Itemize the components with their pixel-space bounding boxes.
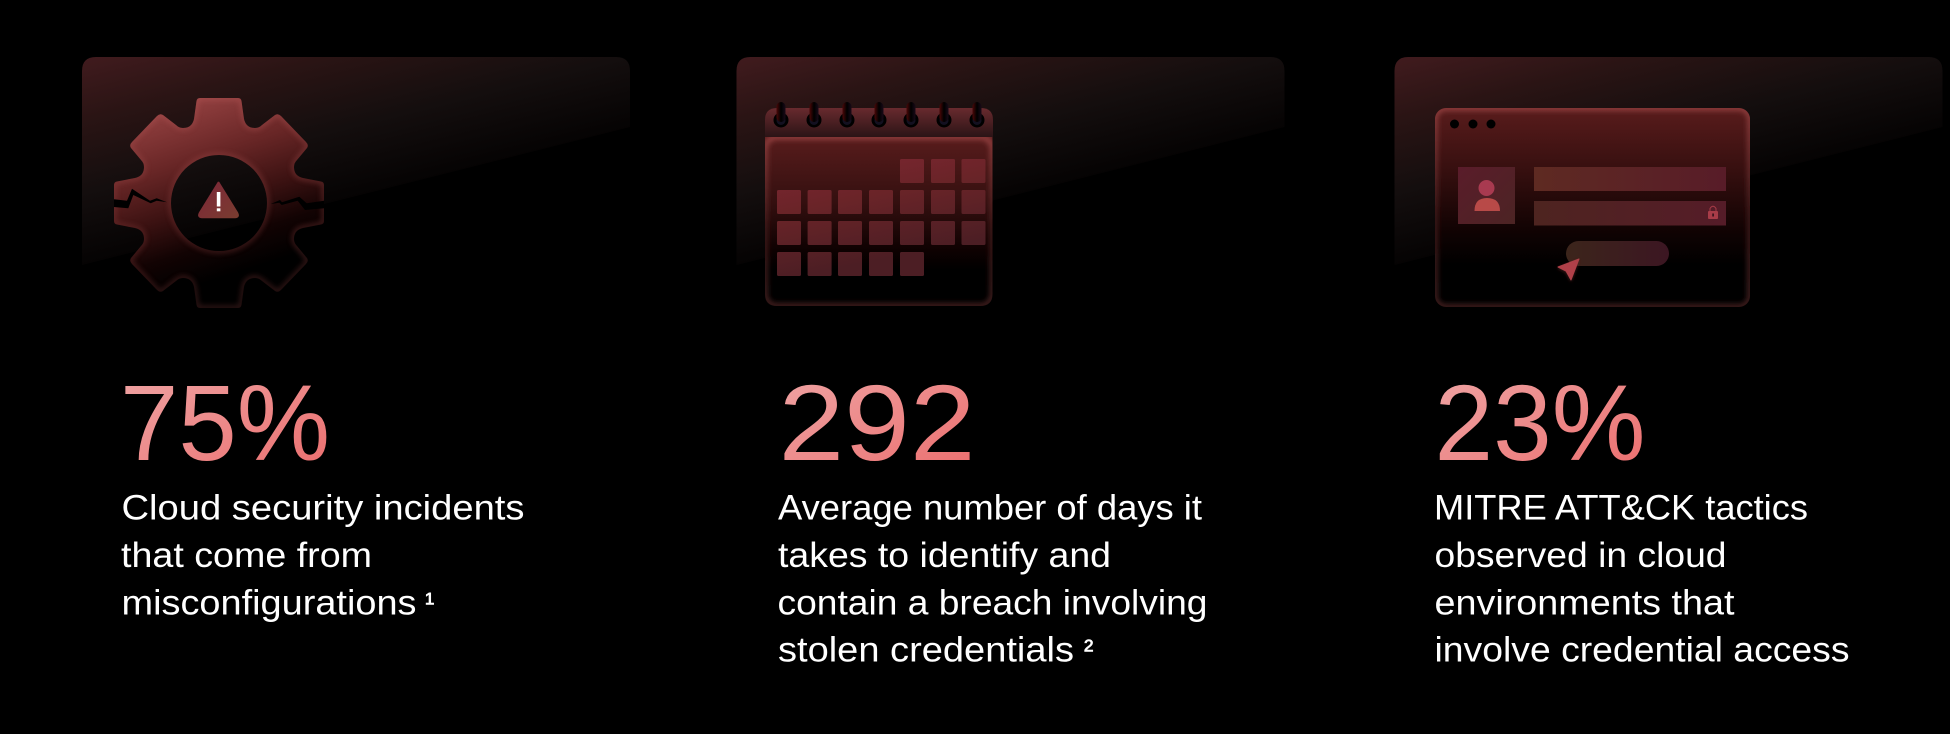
description: misconfigurations bbox=[121, 488, 524, 622]
description: misconfigurations: ¹ bbox=[425, 588, 434, 618]
panel: misconfigurations stat bbox=[82, 57, 630, 622]
panel background: login window bbox=[1394, 57, 1942, 265]
stat: 292: 292 bbox=[778, 362, 976, 483]
description: misconfigurations: Cloud security incidents bbox=[122, 488, 524, 528]
description: misconfigurations: misconfigurations bbox=[122, 584, 416, 622]
icon: login browser window bbox=[1435, 108, 1750, 307]
description: stolen credentials: ² bbox=[1084, 634, 1093, 666]
description: credential access: involve credential access bbox=[1434, 630, 1850, 670]
stat: 75%: 75% bbox=[120, 362, 330, 483]
description: credential access: MITRE ATT&CK tactics bbox=[1434, 488, 1808, 528]
description: misconfigurations: that come from bbox=[121, 536, 372, 575]
panel: stolen credentials stat bbox=[736, 57, 1284, 670]
description: stolen credentials bbox=[778, 488, 1208, 670]
description: stolen credentials: stolen credentials bbox=[778, 630, 1074, 670]
description: stolen credentials: contain a breach involving bbox=[778, 584, 1208, 622]
panel: credential access stat bbox=[1394, 57, 1942, 670]
description: stolen credentials: Average number of days it bbox=[778, 488, 1202, 528]
panel background: calendar bbox=[736, 57, 1284, 265]
panel background: gear bbox=[82, 57, 630, 265]
stat: 23%: 23% bbox=[1434, 362, 1646, 483]
description: stolen credentials: takes to identify and bbox=[778, 536, 1111, 575]
description: credential access bbox=[1434, 488, 1850, 670]
icon: cracked gear with warning bbox=[114, 98, 324, 308]
icon: calendar bbox=[765, 102, 993, 306]
description: credential access: observed in cloud bbox=[1434, 536, 1726, 575]
description: credential access: environments that bbox=[1434, 584, 1735, 622]
